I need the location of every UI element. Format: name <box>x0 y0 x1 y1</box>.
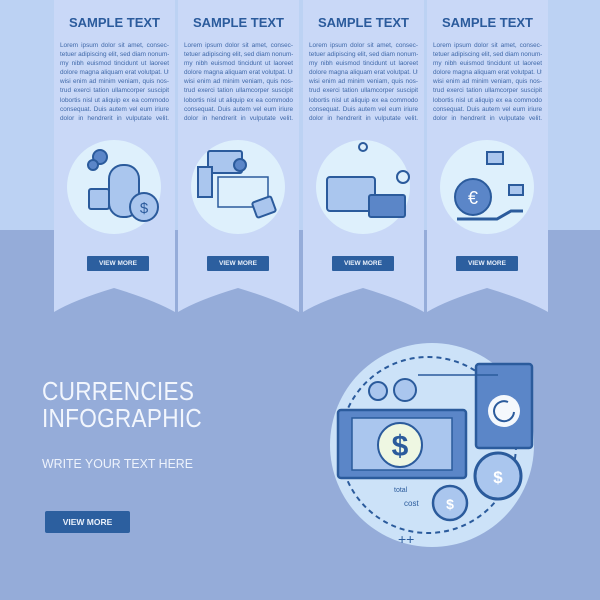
main button: VIEW MORE <box>63 517 112 527</box>
card 1 button: VIEW MORE <box>99 260 137 267</box>
document <box>476 364 532 448</box>
card 1 text: wisi enim ad minim veniam, quis nos- <box>60 78 169 85</box>
card 3 text: tetuer adipiscing elit, sed diam nonum- <box>309 51 418 58</box>
card 3 text: trud exerci tation ullamcorper suscipit <box>309 87 418 94</box>
card 3 text: Lorem ipsum dolor sit amet, consec- <box>309 42 418 49</box>
card 4 text: dolor in hendrerit in vulputate velit. <box>433 115 542 122</box>
card 3 text <box>309 42 418 122</box>
card 2 title: SAMPLE TEXT <box>193 15 284 30</box>
card 3 button <box>332 256 394 271</box>
card 1 text: trud exerci tation ullamcorper suscipit <box>60 87 169 94</box>
card 1 text: consequat. Duis autem vel eum iriure <box>60 106 169 113</box>
main illustration: currency exchange: cost <box>404 499 419 508</box>
card 1 <box>54 0 175 312</box>
card 3 text: my nibh euismod tincidunt ut laoreet <box>309 60 418 67</box>
card 2 <box>178 0 299 312</box>
card 4 button: VIEW MORE <box>468 260 506 267</box>
card 4 <box>427 0 548 312</box>
card 4 text: my nibh euismod tincidunt ut laoreet <box>433 60 542 67</box>
card 4 text <box>433 42 542 122</box>
card 3 icon: wallet and bills <box>316 140 410 234</box>
main illustration: currency exchange: ++ <box>398 531 414 547</box>
card 2 text: lobortis nisl ut aliquip ex ea commodo <box>184 97 293 104</box>
card 4 title: SAMPLE TEXT <box>442 15 533 30</box>
card 3 text: consequat. Duis autem vel eum iriure <box>309 106 418 113</box>
card 4 text: tetuer adipiscing elit, sed diam nonum- <box>433 51 542 58</box>
main title: INFOGRAPHIC <box>42 403 202 433</box>
card 1 text: dolore magna aliquam erat volutpat. Ut <box>60 69 169 76</box>
card 1 text: my nibh euismod tincidunt ut laoreet <box>60 60 169 67</box>
main illustration: currency exchange: $ <box>392 430 409 463</box>
card 3 text: dolore magna aliquam erat volutpat. Ut <box>309 69 418 76</box>
card 3 text: dolor in hendrerit in vulputate velit. <box>309 115 418 122</box>
card 2 button <box>207 256 269 271</box>
card 3 button: VIEW MORE <box>344 260 382 267</box>
card 3 title: SAMPLE TEXT <box>318 15 409 30</box>
card 1 button <box>87 256 149 271</box>
card 2 text: my nibh euismod tincidunt ut laoreet <box>184 60 293 67</box>
card 2 button: VIEW MORE <box>219 260 257 267</box>
card 3 <box>303 0 424 312</box>
card 2 text: tetuer adipiscing elit, sed diam nonum- <box>184 51 293 58</box>
card 4 icon: euro bag on hand: € <box>468 188 478 208</box>
main illustration: currency exchange: total <box>394 487 408 494</box>
coins <box>369 382 387 400</box>
card 1 text: tetuer adipiscing elit, sed diam nonum- <box>60 51 169 58</box>
card 1 text: Lorem ipsum dolor sit amet, consec- <box>60 42 169 49</box>
card 4 text: dolore magna aliquam erat volutpat. Ut <box>433 69 542 76</box>
card 2 text: dolor in hendrerit in vulputate velit. <box>184 115 293 122</box>
card 1 text: lobortis nisl ut aliquip ex ea commodo <box>60 97 169 104</box>
card 1 text <box>60 42 169 122</box>
card 4 text: lobortis nisl ut aliquip ex ea commodo <box>433 97 542 104</box>
card 2 text: Lorem ipsum dolor sit amet, consec- <box>184 42 293 49</box>
main illustration: currency exchange: $ <box>446 496 454 512</box>
main title: CURRENCIES <box>42 376 194 406</box>
main button <box>45 511 130 533</box>
card 2 text: consequat. Duis autem vel eum iriure <box>184 106 293 113</box>
card 3 text: wisi enim ad minim veniam, quis nos- <box>309 78 418 85</box>
main title <box>42 376 202 433</box>
card 4 text: trud exerci tation ullamcorper suscipit <box>433 87 542 94</box>
card 4 button <box>456 256 518 271</box>
card 2 text <box>184 42 293 122</box>
card 2 text: trud exerci tation ullamcorper suscipit <box>184 87 293 94</box>
subtitle: WRITE YOUR TEXT HERE <box>42 456 193 471</box>
main illustration: currency exchange: $ <box>493 468 503 487</box>
card 1 icon: vault and money bag <box>67 140 161 234</box>
card 4 text: Lorem ipsum dolor sit amet, consec- <box>433 42 542 49</box>
card 1 icon: vault and money bag: $ <box>140 200 149 217</box>
card 2 text: wisi enim ad minim veniam, quis nos- <box>184 78 293 85</box>
main illustration: currency exchange <box>330 343 534 547</box>
card 1 title: SAMPLE TEXT <box>69 15 160 30</box>
card 4 text: consequat. Duis autem vel eum iriure <box>433 106 542 113</box>
card 1 text: dolor in hendrerit in vulputate velit. <box>60 115 169 122</box>
card 2 text: dolore magna aliquam erat volutpat. Ut <box>184 69 293 76</box>
card 4 text: wisi enim ad minim veniam, quis nos- <box>433 78 542 85</box>
card 3 text: lobortis nisl ut aliquip ex ea commodo <box>309 97 418 104</box>
card 4 icon: euro bag on hand <box>440 140 534 234</box>
banknote <box>338 410 466 478</box>
card 2 icon: hand and cards chart <box>191 140 285 234</box>
